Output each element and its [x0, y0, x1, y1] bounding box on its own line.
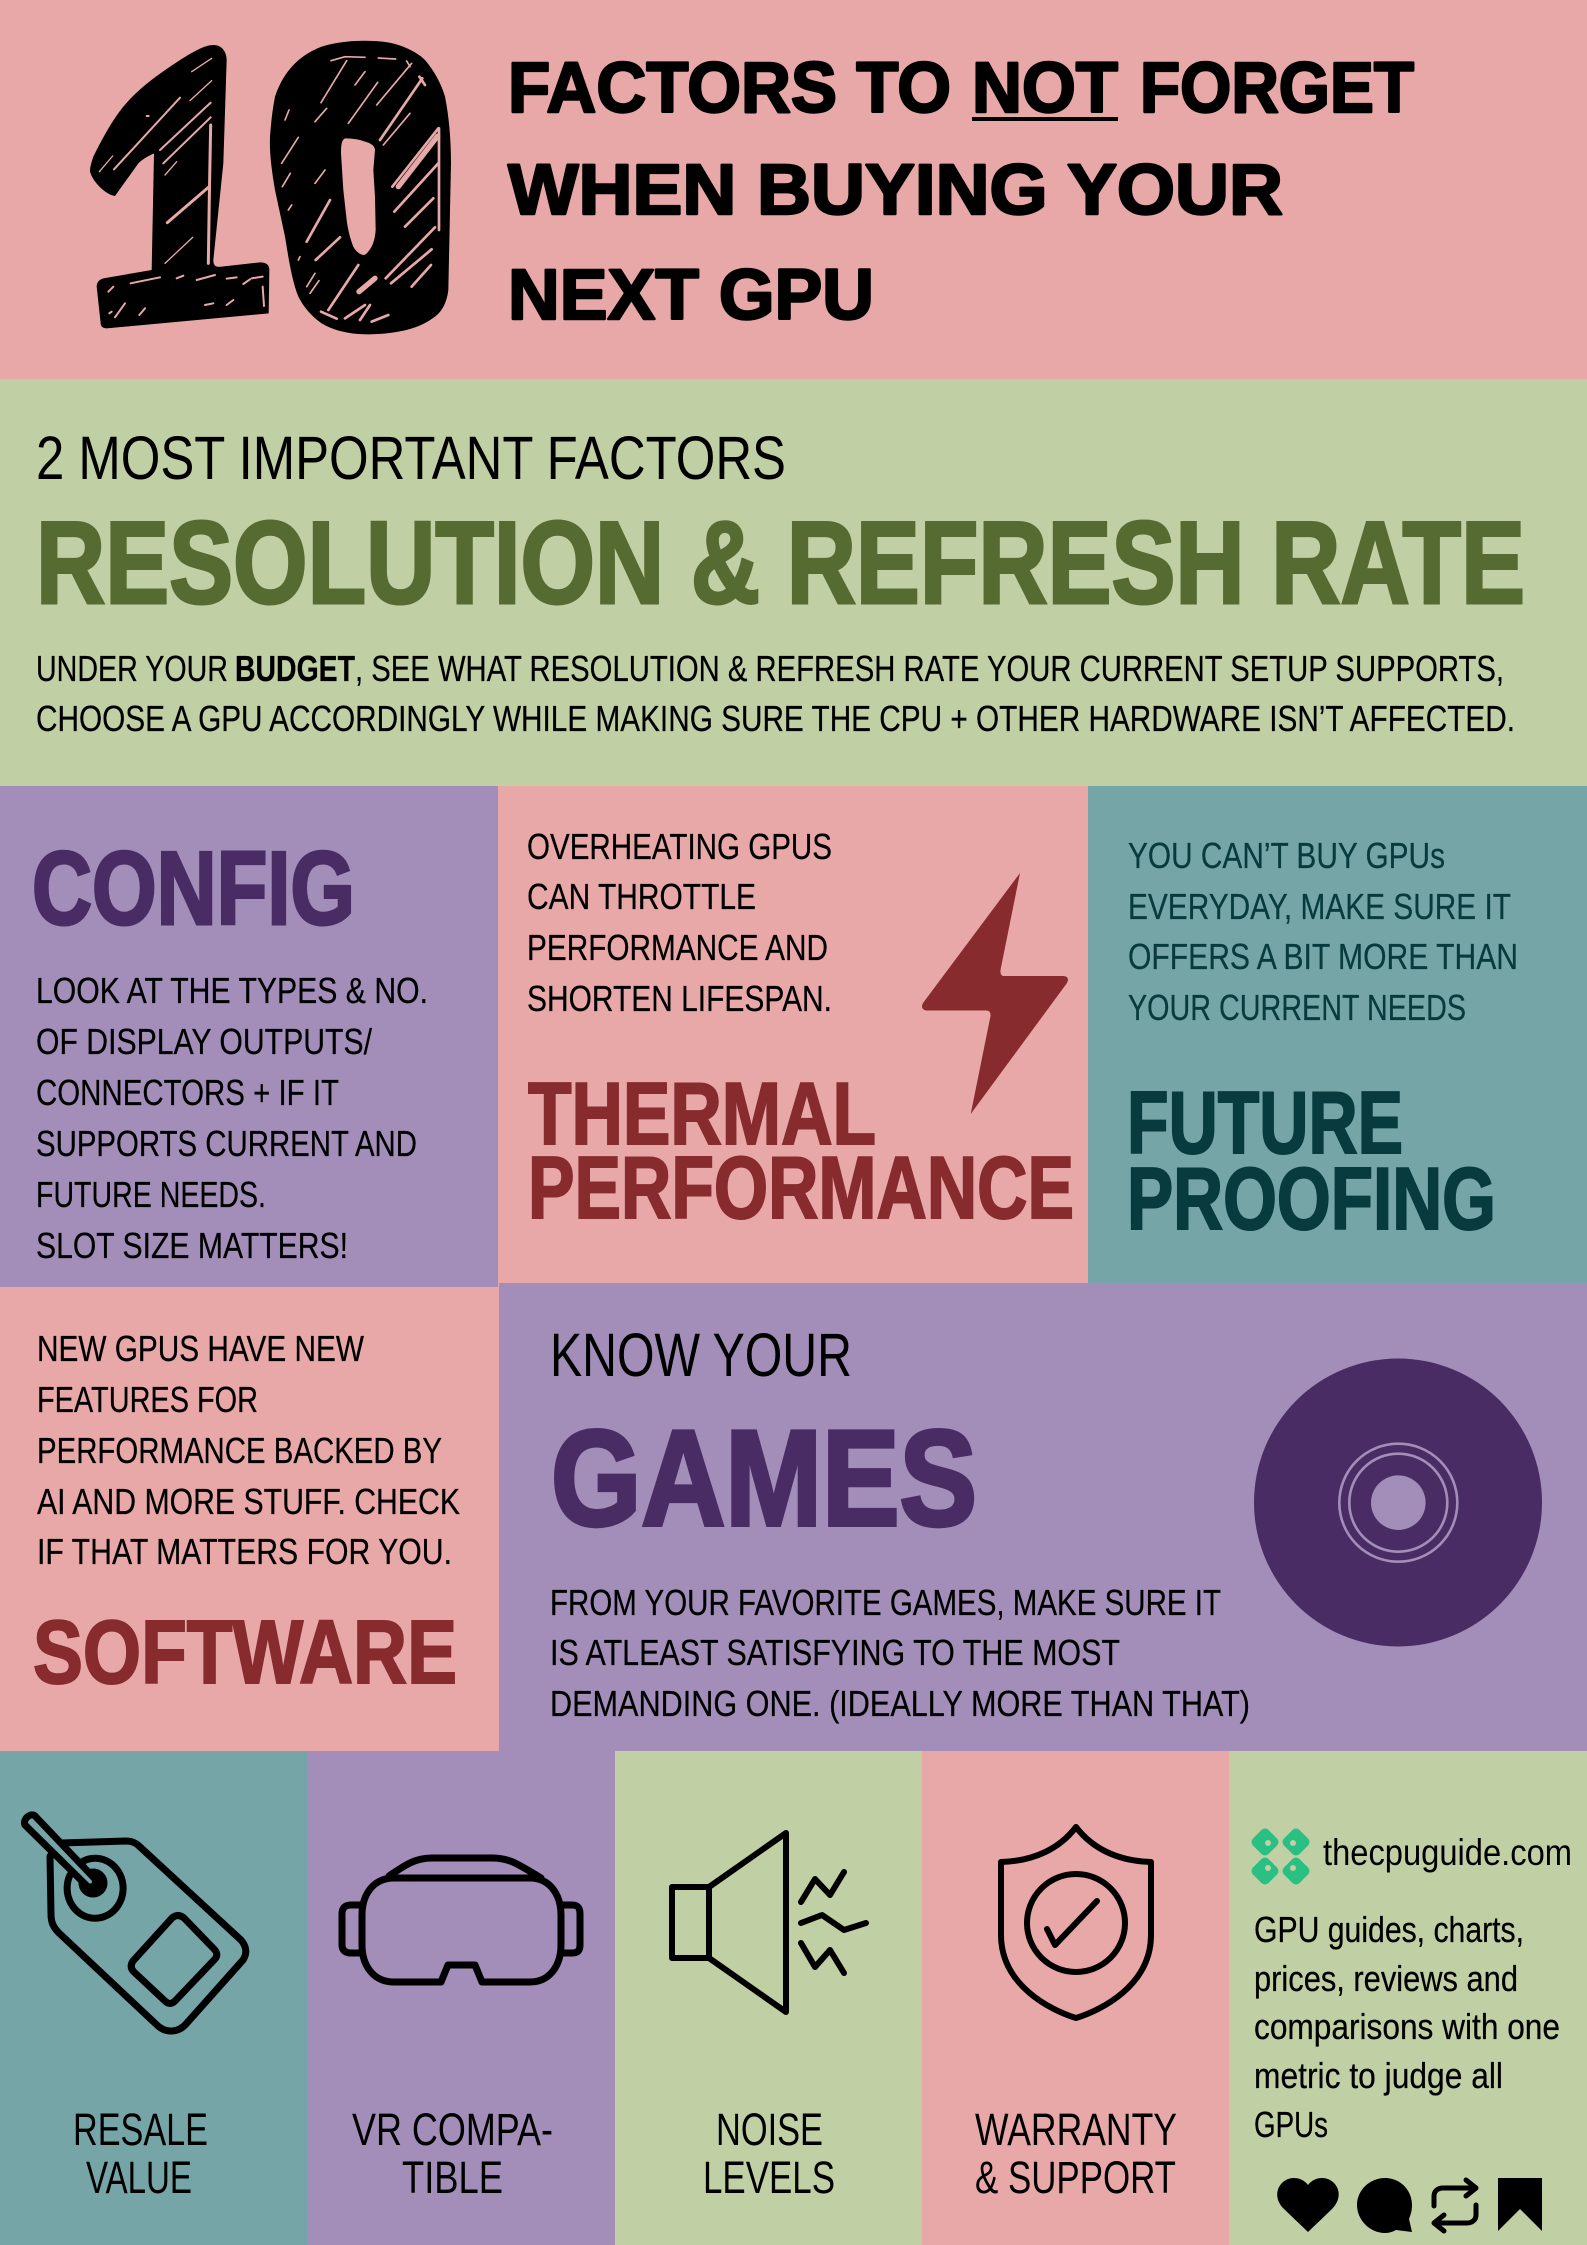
subheading: KNOW YOUR: [550, 1321, 852, 1389]
text block: prices, reviews and: [1254, 1958, 1518, 1999]
panel: resale value: [0, 1751, 307, 2245]
text block: OVERHEATING GPUS: [527, 826, 832, 867]
panel: config: [0, 786, 498, 1287]
panel: know your games: [499, 1283, 1587, 1751]
text block: metric to judge all: [1254, 2055, 1503, 2096]
text block: FEATURES FOR: [37, 1379, 258, 1420]
panel: vr compatible: [307, 1751, 615, 2245]
text block: OFFERS A BIT MORE THAN: [1128, 936, 1518, 977]
label: LEVELS: [703, 2152, 835, 2203]
icon: logo: [1249, 1826, 1312, 1887]
label: [703, 2104, 835, 2203]
text block: LOOK AT THE TYPES & NO.: [36, 970, 428, 1011]
label: & SUPPORT: [975, 2152, 1176, 2203]
heading: CONFIG: [32, 831, 355, 947]
icon: bookmark: [1498, 2178, 1542, 2231]
text block: GPUs: [1254, 2104, 1328, 2145]
icon: shield with check: [1001, 1827, 1151, 2018]
heading: [528, 1064, 1074, 1237]
label: VALUE: [86, 2152, 192, 2203]
text block: DEMANDING ONE. (IDEALLY MORE THAN THAT): [550, 1683, 1250, 1724]
text block: EVERYDAY, MAKE SURE IT: [1128, 886, 1511, 927]
panel: thermal performance: [498, 786, 1088, 1283]
panel: header: [0, 0, 1587, 379]
panel: noise levels: [615, 1751, 922, 2245]
title: FACTORS TO: [508, 49, 951, 128]
text block: YOUR CURRENT NEEDS: [1128, 987, 1466, 1028]
text block: [36, 970, 428, 1266]
text block: OF DISPLAY OUTPUTS/: [36, 1021, 372, 1062]
text block: SHORTEN LIFESPAN.: [527, 978, 832, 1019]
panel: future proofing: [1088, 786, 1587, 1283]
text block: SUPPORTS CURRENT AND: [36, 1123, 417, 1164]
label: TIBLE: [402, 2152, 503, 2203]
text block: FUTURE NEEDS.: [36, 1174, 266, 1215]
title: NEXT GPU: [508, 256, 874, 335]
icon: vr headset: [342, 1858, 580, 1982]
title: WHEN BUYING YOUR: [508, 151, 1283, 230]
text block: CONNECTORS + IF IT: [36, 1072, 339, 1113]
label: [975, 2104, 1177, 2203]
text block: CAN THROTTLE: [527, 876, 756, 917]
panel: resolution and refresh rate: [0, 379, 1587, 786]
heading: PERFORMANCE: [528, 1138, 1074, 1237]
label: RESALE: [73, 2104, 208, 2155]
label: WARRANTY: [975, 2104, 1177, 2155]
icon: repost arrows: [1434, 2180, 1476, 2231]
icon: game disc: [1254, 1358, 1542, 1646]
text block: AI AND MORE STUFF. CHECK: [37, 1481, 460, 1522]
text block: PERFORMANCE BACKED BY: [37, 1430, 442, 1471]
heading: GAMES: [551, 1402, 977, 1554]
text block: IF THAT MATTERS FOR YOU.: [37, 1531, 452, 1572]
label: VR COMPA-: [352, 2104, 553, 2155]
icon: price tag: [24, 1815, 246, 2031]
label: [352, 2104, 553, 2203]
text block: SLOT SIZE MATTERS!: [36, 1225, 348, 1266]
icon: lightning bolt: [922, 873, 1068, 1114]
heading: SOFTWARE: [33, 1603, 457, 1703]
heading: THERMAL: [528, 1064, 876, 1163]
heading: PROOFING: [1127, 1149, 1496, 1248]
text block: [1128, 835, 1518, 1028]
heading: FUTURE: [1127, 1073, 1403, 1172]
text block: UNDER YOUR: [36, 648, 228, 689]
text block: GPU guides, charts,: [1254, 1909, 1524, 1950]
title: NOT: [972, 49, 1118, 128]
text block: IS ATLEAST SATISFYING TO THE MOST: [550, 1632, 1120, 1673]
icon: comment bubble: [1357, 2178, 1412, 2233]
text block: [550, 1582, 1250, 1724]
text block: PERFORMANCE AND: [527, 927, 828, 968]
text block: YOU CAN’T BUY GPUs: [1128, 835, 1445, 876]
panel: software: [0, 1287, 499, 1751]
title: [508, 49, 1414, 335]
heading: [1127, 1073, 1496, 1248]
text block: [37, 1328, 460, 1572]
icon: heart: [1277, 2178, 1339, 2232]
text block: FROM YOUR FAVORITE GAMES, MAKE SURE IT: [550, 1582, 1221, 1623]
title: FORGET: [1140, 49, 1414, 128]
text block: [527, 826, 832, 1019]
text block: [36, 648, 1515, 739]
label: [73, 2104, 208, 2203]
text block: BUDGET: [235, 648, 355, 689]
text block: [1254, 1909, 1560, 2145]
panel: brand: [1229, 1751, 1587, 2245]
label: NOISE: [716, 2104, 823, 2155]
text block: NEW GPUS HAVE NEW: [37, 1328, 364, 1369]
icon: speaker: [672, 1833, 866, 2012]
panel: warranty and support: [922, 1751, 1229, 2245]
icon: hand sketched number 10: [90, 41, 451, 334]
subheading: 2 MOST IMPORTANT FACTORS: [36, 424, 786, 492]
